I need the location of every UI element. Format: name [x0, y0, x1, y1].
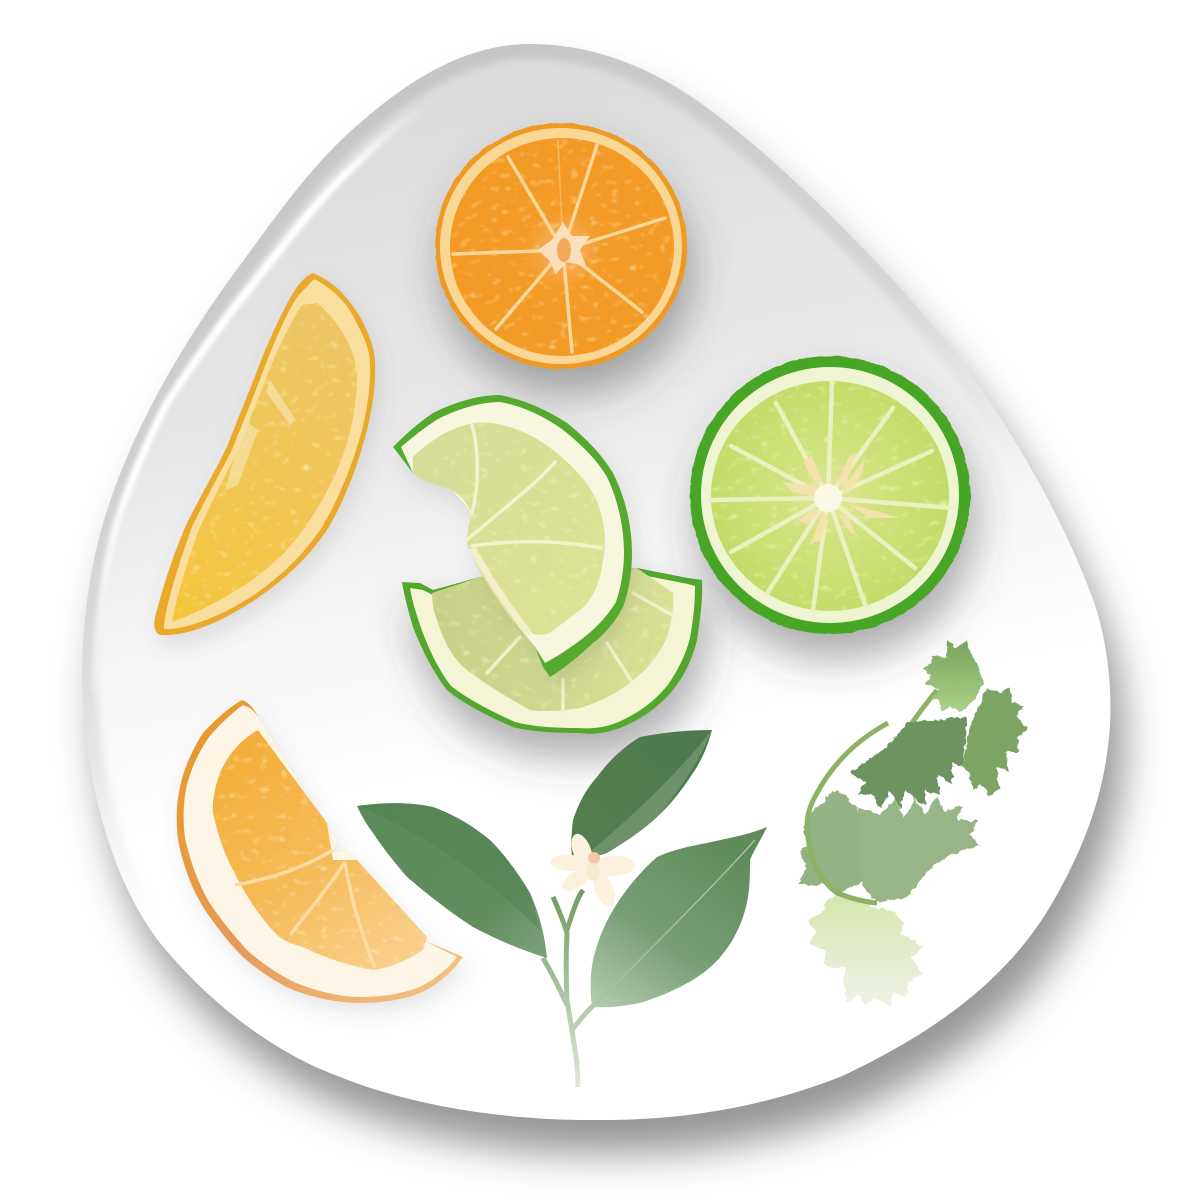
lemon membrane: [225, 380, 296, 490]
bergamot flesh: [711, 381, 949, 611]
orange pith: [440, 128, 682, 364]
wedge membrane: [235, 850, 375, 968]
cilantro leaf lower left: [798, 790, 867, 893]
wedge rind: [177, 700, 463, 1003]
wedge flesh: [213, 730, 427, 970]
leaf left: [357, 803, 547, 958]
orange segments: [453, 140, 665, 352]
wedge pith: [184, 705, 457, 997]
cilantro leaf right: [962, 687, 1028, 796]
orange core: [538, 222, 590, 274]
upper lime wedge: [393, 395, 632, 677]
citrus branch: [357, 730, 767, 1087]
bergamot rind: [690, 356, 970, 634]
cilantro leaf centre dark: [850, 717, 967, 808]
leaf left dark half: [357, 803, 540, 930]
leaf top light half: [585, 730, 712, 857]
upper lime rind: [393, 395, 632, 677]
bergamot centre: [814, 484, 842, 512]
upper lime pith: [401, 402, 624, 663]
flower petals: [549, 831, 635, 910]
lower lime segments: [487, 593, 672, 712]
cilantro leaf bottom: [807, 893, 923, 1008]
rim highlight: [95, 110, 420, 690]
orange half: [435, 123, 687, 369]
lower lime rind: [402, 568, 702, 734]
cilantro leaf lower middle: [858, 797, 980, 903]
branch stem: [543, 890, 595, 1087]
bergamot segments: [711, 382, 952, 610]
cilantro sprig: [798, 640, 1028, 1008]
lower lime wedge: [402, 568, 702, 734]
orange rind: [435, 123, 687, 369]
orange wedge: [177, 700, 463, 1003]
bergamot pith: [701, 367, 959, 623]
cilantro upper cluster: [850, 640, 1028, 808]
plate rim: [82, 44, 984, 861]
upper lime segments: [467, 425, 600, 548]
lemon rind: [154, 273, 375, 635]
cilantro stems: [807, 690, 937, 903]
flower: [549, 831, 635, 910]
cilantro lower cluster: [798, 790, 980, 1008]
flower pistil: [586, 863, 600, 881]
leaf right: [591, 827, 767, 1007]
upper lime flesh: [413, 423, 605, 635]
leaf top: [571, 730, 712, 857]
lower lime pith: [410, 574, 695, 728]
lemon flesh: [172, 303, 357, 622]
plate face: [82, 44, 1110, 1120]
orange flesh: [450, 138, 674, 356]
plate shadow: [96, 78, 1124, 1154]
bergamot seeds: [783, 452, 900, 545]
bergamot slice: [690, 356, 970, 634]
flower stamens: [588, 852, 600, 864]
lemon wedge: [154, 273, 375, 635]
lemon pith: [164, 279, 370, 629]
torn membrane: [472, 548, 530, 635]
cilantro leaf top: [922, 640, 983, 712]
orange core centre: [557, 238, 571, 262]
lower lime flesh: [432, 568, 673, 711]
leaf right midrib: [596, 840, 755, 1003]
